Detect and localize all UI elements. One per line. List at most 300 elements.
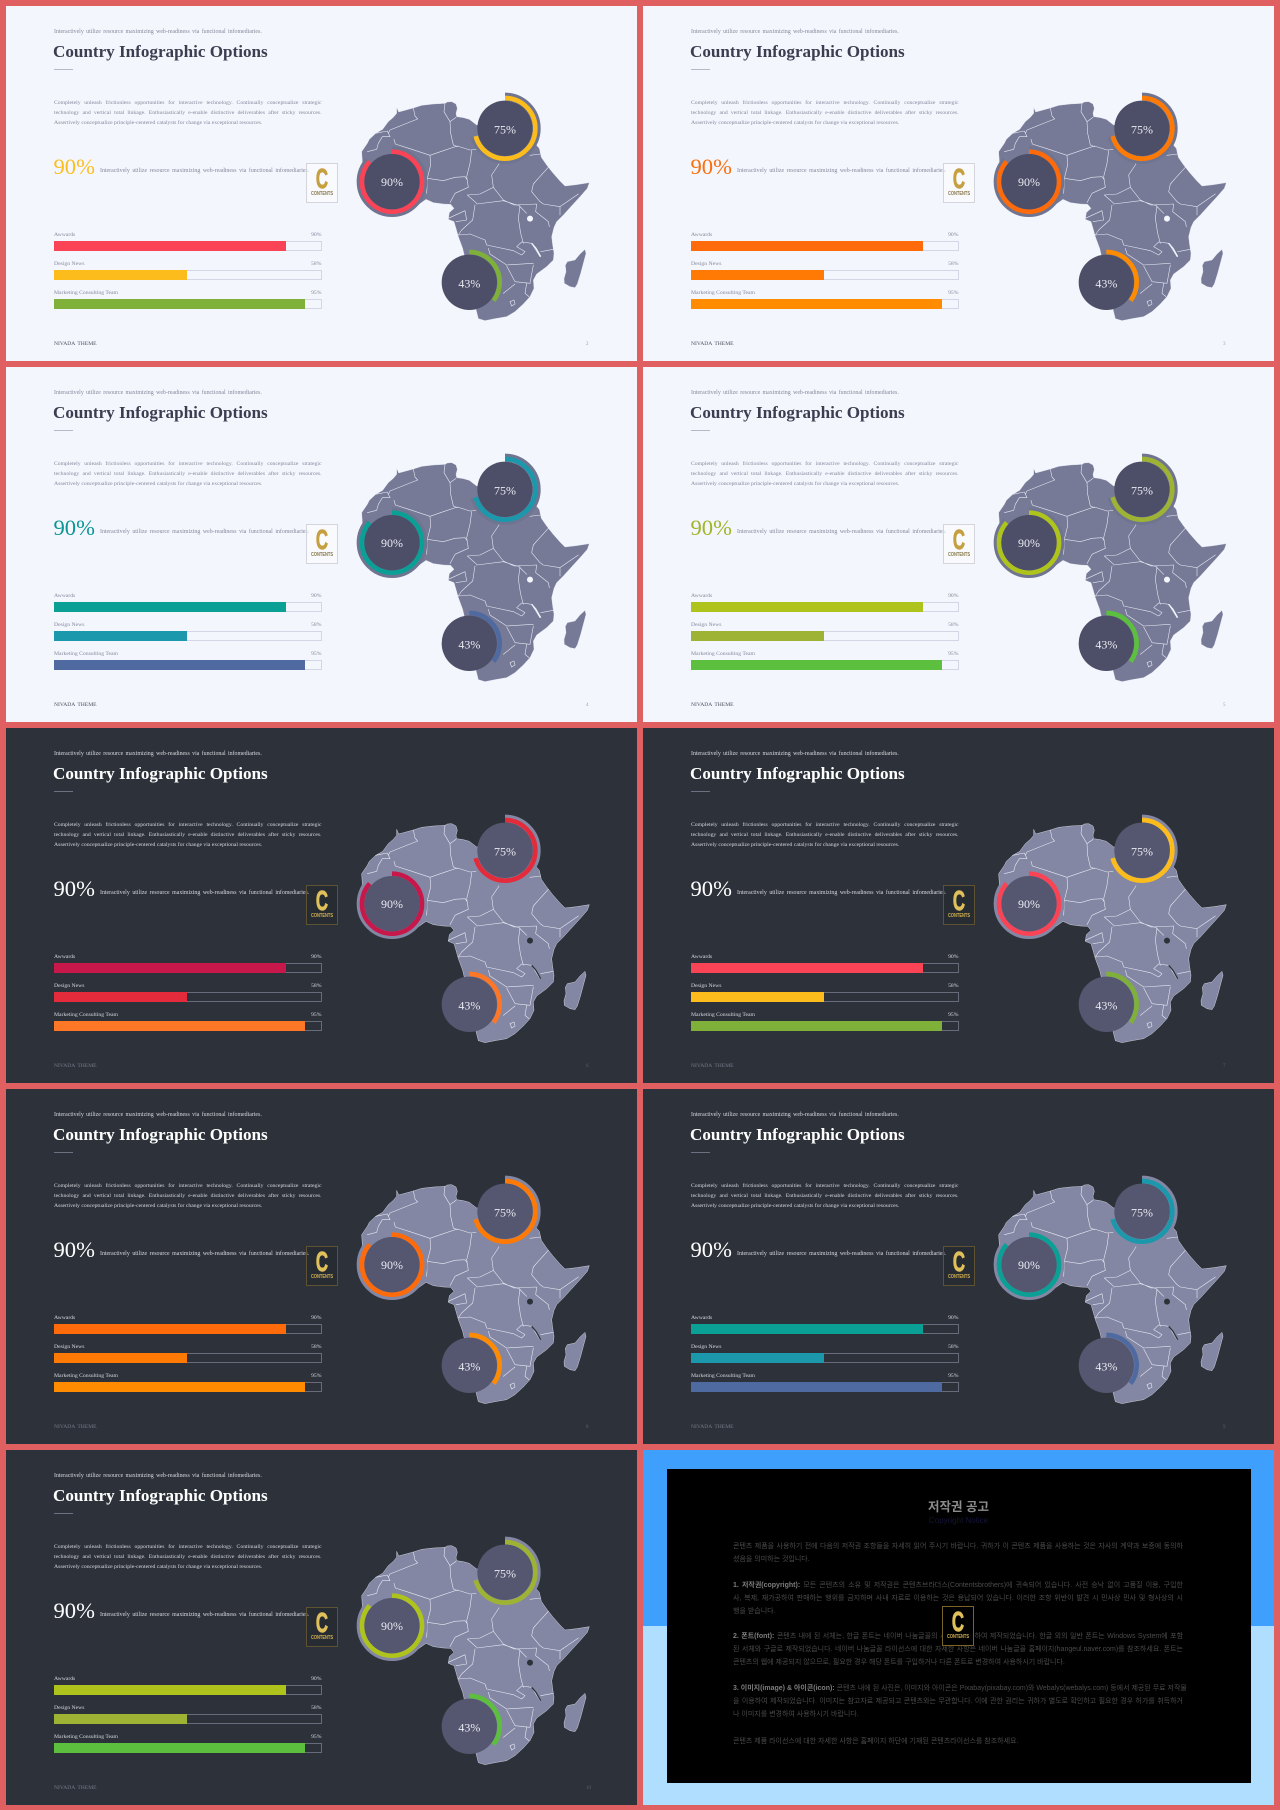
logo badge: C [953,524,965,555]
logo badge: CONTENTS [948,191,970,197]
bar: Design News [691,992,959,1002]
heading: Country Infographic Options [690,764,905,783]
logo badge: CONTENTS [948,1274,970,1280]
bar label: Design News: 58% [948,983,958,989]
body text: Assertively conceptualize principle-centered catalysts for change via exceptional resources. [691,1203,899,1209]
ring: 90% [998,1233,1060,1296]
ring: 90% [998,511,1060,574]
logo badge [306,885,338,925]
stat description: Interactively utilize resource maximizing web-readiness via functional infomediaries. [100,890,309,896]
bar label: Marketing Consulting Team: Marketing Consulting Team [54,1012,118,1018]
body text: technology and vertical total linkage. Enthusiastically e-enable distinctive deliverables after sticky resources. [691,1193,958,1199]
map with progress rings [356,92,590,321]
ring: 90%: 90% [381,1619,403,1633]
bar label: Design News [54,983,322,989]
bar label: Marketing Consulting Team [54,651,322,657]
body text [691,822,958,848]
ring: 43% [1076,613,1137,674]
bar: Design News [691,1353,959,1362]
bar label: Awwards: 90% [948,1315,958,1321]
ring: 90% [998,872,1060,935]
bar: Marketing Consulting Team [54,660,322,670]
ring: 90%: 90% [1018,536,1040,550]
notice item 1: 1. 저작권(copyright): 모든 콘텐츠의 소유 및 저작권은 콘텐츠브라더스(Contentsbrothers)에 귀속되어 있습니다. 사전 승낙 없이 고품질 이용, 구입한 [733,1582,1183,1589]
logo badge: CONTENTS [947,1634,969,1640]
black notice card: 된 서체와 구글로 제작되었습니다. 네이버 나눔글꼴 라이선스에 대한 자세한 사항은 네이버 나눔글꼴 홈페이지(hangeul.naver.com)를 참조하세요. 폰트는 [733,1646,1183,1653]
subtitle: Interactively utilize resource maximizing web-readiness via functional infomediaries. [691,1112,899,1118]
logo badge [306,524,338,564]
body text [54,822,322,848]
ring: 90%: 90% [381,175,403,189]
ring: 75% [1110,1180,1174,1243]
body text: technology and vertical total linkage. Enthusiastically e-enable distinctive deliverables after sticky resources. [691,832,958,838]
bar label: Awwards: Awwards [691,593,712,599]
ring: 43% [439,974,500,1035]
ring: 43% [439,613,500,674]
bar label: Design News: Design News [691,622,722,628]
ring: 43% [439,1335,500,1396]
footer brand: NIVADA THEME [54,341,97,347]
ring: 90% [998,150,1060,213]
ring: 75%: 75% [494,1205,516,1219]
logo badge: CONTENTS [311,1635,333,1641]
logo badge: C [316,885,328,916]
bar: Awwards [54,602,322,612]
bar label: Awwards [691,232,958,238]
subtitle: Interactively utilize resource maximizing web-readiness via functional infomediaries. [691,390,899,396]
heading: Country Infographic Options [53,1125,268,1144]
logo badge: C [316,1246,328,1277]
notice subtitle: Copyright Notice [929,1516,988,1525]
bar label: Marketing Consulting Team: Marketing Consulting Team [691,1012,755,1018]
map with progress rings [356,1176,590,1404]
black notice card: 사, 복제, 재가공하여 판매하는 행위를 금지하며 사내 자료로 이용하는 것은 용납되어 있습니다. 이러한 조항 위반이 발견 시 민사상 민사 및 형사상의 시 [733,1595,1183,1602]
bar label: Design News [54,622,322,628]
bar label: Design News: Design News [691,261,722,267]
bar label: Awwards: Awwards [54,232,75,238]
footer brand: NIVADA THEME [54,1424,97,1430]
bar: Design News [54,1714,322,1724]
ring: 90%: 90% [381,536,403,550]
subtitle: Interactively utilize resource maximizing web-readiness via functional infomediaries. [54,1112,262,1118]
logo badge [943,885,975,925]
bar label: Design News: 58% [948,622,958,628]
logo badge: CONTENTS [948,552,970,558]
bar label: Design News: Design News [54,983,84,989]
ring: 75% [473,458,537,521]
ring: 43%: 43% [458,1720,480,1734]
body text: Assertively conceptualize principle-centered catalysts for change via exceptional resources. [691,120,899,126]
bar label: Marketing Consulting Team: Marketing Consulting Team [691,290,755,296]
bar: Design News [54,631,322,640]
bar label: Awwards: Awwards [691,954,712,960]
panel: light lime [643,367,1274,722]
bar label: Design News [54,1704,322,1712]
panel: dark crimson orange [6,728,637,1083]
body text: Assertively conceptualize principle-centered catalysts for change via exceptional resources. [691,481,899,487]
ring: 43% [439,1696,500,1757]
logo badge [306,1607,338,1647]
bar label: Marketing Consulting Team: Marketing Consulting Team [54,651,118,657]
body text: Assertively conceptualize principle-centered catalysts for change via exceptional resources. [54,120,262,126]
bar: Marketing Consulting Team [691,1021,959,1030]
page number: 2 [586,342,588,347]
bar: Awwards [691,602,959,612]
black notice card: 콘텐츠의 웹에 제공되지 않으므로, 필요한 경우 해당 폰트를 구입하거나 다른 폰트로 변경하여 사용하시기 바랍니다. [733,1659,1065,1666]
page number: 5 [1223,703,1226,708]
body text [54,100,322,126]
notice intro: 콘텐츠 제품을 사용하기 전에 다음의 저작권 조항들을 자세히 읽어 주시기 바랍니다. 귀하가 이 콘텐츠 제품을 사용하는 것은 자사의 계약과 보증에 동의하 [733,1543,1183,1550]
body text: Assertively conceptualize principle-centered catalysts for change via exceptional resources. [54,481,262,487]
ring: 75% [1110,458,1174,521]
black notice card: 나 이미지를 변경하여 사용하시기 바랍니다. [733,1711,859,1718]
bar: Awwards [691,963,959,972]
page number: 7 [1223,1064,1226,1069]
heading: Country Infographic Options [53,403,268,422]
bar: Design News [691,631,959,640]
body text: technology and vertical total linkage. Enthusiastically e-enable distinctive deliverables after sticky resources. [691,110,958,116]
bar label: Awwards: Awwards [54,593,75,599]
panel: dark lime [6,1450,637,1805]
ring: 75% [1110,97,1174,160]
body text: technology and vertical total linkage. Enthusiastically e-enable distinctive deliverables after sticky resources. [54,110,322,116]
bar label: Design News [54,261,322,267]
body text: Completely unleash frictionless opportunities for interactive technology. Continually conceptualize strategic [54,100,322,106]
body text: Assertively conceptualize principle-centered catalysts for change via exceptional resources. [691,842,899,848]
ring: 43%: 43% [1095,1359,1117,1373]
body text: Assertively conceptualize principle-centered catalysts for change via exceptional resources. [54,842,262,848]
stat description: Interactively utilize resource maximizing web-readiness via functional infomediaries. [737,890,946,896]
bar label: Marketing Consulting Team: 95% [948,1373,958,1379]
bar: Design News [691,270,959,280]
bar label: Design News: 58% [311,1705,322,1711]
body text: Completely unleash frictionless opportunities for interactive technology. Continually conceptualize strategic [54,461,322,467]
logo badge [306,1246,338,1286]
bar label: Marketing Consulting Team: Marketing Consulting Team [54,1734,118,1740]
ring: 75% [473,819,537,882]
bar: Awwards [54,963,322,972]
bar label: Design News [691,622,958,628]
bar label: Marketing Consulting Team: 95% [311,1734,322,1740]
bar label: Awwards: 90% [948,954,958,960]
bar label: Design News: Design News [54,1344,84,1350]
map with progress rings [994,454,1226,682]
heading: Country Infographic Options [690,403,905,422]
body text [54,461,322,487]
map with progress rings [994,92,1226,321]
stat: 90%: 90% [690,515,732,540]
body text: Completely unleash frictionless opportunities for interactive technology. Continually conceptualize strategic [54,1183,322,1189]
footer brand: NIVADA THEME [54,702,97,708]
ring: 43% [1076,252,1137,313]
footer brand: NIVADA THEME [54,1063,97,1069]
black notice card: 셨음을 의미하는 것입니다. [733,1556,810,1562]
page number: 3 [1223,342,1226,347]
bar: Awwards [691,1324,959,1334]
logo badge: C [316,1607,328,1638]
bar label: Marketing Consulting Team [691,1012,958,1018]
ring: 90% [361,1594,423,1657]
logo badge: C [316,163,328,194]
bar label: Design News: Design News [691,1344,722,1350]
page number: 6 [586,1064,588,1069]
logo badge [942,1606,974,1646]
footer brand: NIVADA THEME [691,1063,734,1069]
panel: light teal [6,367,637,722]
ring: 43%: 43% [1095,637,1117,651]
ring: 43%: 43% [458,1359,480,1373]
footer brand: NIVADA THEME [691,702,734,708]
bar: Awwards [54,1685,322,1694]
bar label: Design News: 58% [948,261,958,267]
body text: Completely unleash frictionless opportunities for interactive technology. Continually conceptualize strategic [54,1544,322,1550]
stat description: Interactively utilize resource maximizing web-readiness via functional infomediaries. [100,168,309,174]
logo badge: CONTENTS [311,913,333,919]
body text: Completely unleash frictionless opportunities for interactive technology. Continually conceptualize strategic [691,100,958,106]
heading: Country Infographic Options [53,764,268,783]
bar label: Awwards: Awwards [54,1676,75,1682]
logo badge: CONTENTS [311,1274,333,1280]
ring: 90%: 90% [1018,175,1040,189]
bar label: Marketing Consulting Team [54,1012,322,1018]
bar label: Awwards: 90% [311,1676,322,1682]
ring: 75% [473,1541,537,1604]
stat description: Interactively utilize resource maximizing web-readiness via functional infomediaries. [100,1612,309,1618]
ring: 90%: 90% [1018,1258,1040,1272]
panel: dark teal [643,1089,1274,1444]
stat: 90%: 90% [54,154,95,179]
ring: 43%: 43% [1095,998,1117,1012]
panel: dark red yellow green [643,728,1274,1083]
ring: 43%: 43% [458,276,480,290]
logo badge: C [953,1246,965,1277]
stat: 90%: 90% [690,1237,732,1262]
black notice card: 행을 받습니다. [733,1608,776,1615]
bar: Awwards [54,241,322,250]
ring: 90%: 90% [381,897,403,911]
bar label: Marketing Consulting Team [54,1373,322,1379]
body text: Completely unleash frictionless opportunities for interactive technology. Continually conceptualize strategic [691,461,958,467]
stat description: Interactively utilize resource maximizing web-readiness via functional infomediaries. [737,529,946,535]
map with progress rings [330,1524,620,1804]
bar label: Awwards [54,1315,322,1321]
logo badge: CONTENTS [948,913,970,919]
bar label: Design News: Design News [54,261,84,267]
bar: Marketing Consulting Team [54,1021,322,1030]
ring: 75% [473,97,537,160]
bar label: Marketing Consulting Team: 95% [948,651,958,657]
notice title: 저작권 공고 [928,1500,989,1514]
bar label: Marketing Consulting Team: Marketing Consulting Team [54,290,118,296]
stat: 90%: 90% [54,876,95,901]
bar label: Marketing Consulting Team [691,290,958,296]
body text [691,100,958,126]
bar label: Awwards: 90% [948,593,958,599]
body text [54,1542,322,1572]
ring: 43%: 43% [458,998,480,1012]
page number: 9 [1223,1425,1226,1430]
ring: 75% [473,1180,537,1243]
notice closing: 콘텐츠 제품 라이선스에 대한 자세한 사항은 홈페이지 하단에 기재된 콘텐츠라이선스를 참조하세요. [733,1738,1018,1745]
bar label: Awwards: Awwards [54,1315,75,1321]
ring: 75%: 75% [494,122,516,136]
black notice card [666,1469,1250,1783]
bar: Awwards [54,1324,322,1334]
ring: 75%: 75% [1131,844,1153,858]
black notice card: 을 이용하여 제작되었습니다. 이미지는 참고자료 제공되고 콘텐츠와는 무관합니다. 이에 관한 권리는 귀하가 별도로 확인하고 필요한 경우 허가를 취득하거 [733,1698,1183,1705]
map with progress rings [994,1176,1227,1404]
bar label: Awwards [54,232,322,238]
bar label: Awwards: Awwards [54,954,75,960]
panel: light red yellow green [6,6,637,361]
body text: technology and vertical total linkage. Enthusiastically e-enable distinctive deliverables after sticky resources. [54,1193,322,1199]
heading: Country Infographic Options [53,42,268,61]
map with progress rings [356,454,590,682]
logo badge [943,524,975,564]
subtitle: Interactively utilize resource maximizing web-readiness via functional infomediaries. [691,28,899,34]
ring: 90% [361,150,423,213]
bar label: Marketing Consulting Team: Marketing Consulting Team [691,651,755,657]
bar label: Design News: 58% [311,622,322,628]
ring: 43%: 43% [1095,276,1117,290]
bar label: Marketing Consulting Team: Marketing Consulting Team [691,1373,755,1379]
map with progress rings [356,814,590,1043]
bar: Marketing Consulting Team [54,299,322,308]
bar label: Awwards: 90% [311,593,322,599]
ring: 75%: 75% [1131,122,1153,136]
stat: 90%: 90% [690,876,732,901]
bar label: Marketing Consulting Team: 95% [311,1373,322,1379]
bar label: Marketing Consulting Team [691,1373,958,1379]
bar label: Design News: 58% [311,261,322,267]
stat description: Interactively utilize resource maximizing web-readiness via functional infomediaries. [100,529,309,535]
logo badge [943,163,975,203]
bar label: Design News [691,1344,958,1350]
bar label: Awwards [691,593,958,599]
bar label: Awwards [54,593,322,599]
bar label: Marketing Consulting Team [54,290,322,296]
bar label: Design News: 58% [948,1344,958,1350]
bar label: Marketing Consulting Team: 95% [311,290,322,296]
ring: 43% [1076,1335,1137,1396]
logo badge: CONTENTS [311,552,333,558]
bar label: Marketing Consulting Team: 95% [311,1012,322,1018]
page number: 4 [586,703,588,708]
bar label: Awwards [691,954,958,960]
logo badge: C [953,163,965,194]
bar label: Marketing Consulting Team: 95% [948,1012,958,1018]
bar label: Design News: Design News [54,622,84,628]
ring: 90%: 90% [381,1258,403,1272]
body text [691,461,958,487]
logo badge: C [952,1606,964,1637]
bar: Design News [54,1353,322,1362]
bar label: Awwards: 90% [311,954,322,960]
bar label: Awwards: 90% [948,232,958,238]
heading: Country Infographic Options [690,42,905,61]
bar label: Awwards: 90% [311,232,322,238]
bar label: Awwards [54,1675,322,1683]
heading: Country Infographic Options [690,1125,905,1144]
bar: Design News [54,992,322,1002]
page number: 8 [586,1425,588,1430]
subtitle: Interactively utilize resource maximizing web-readiness via functional infomediaries. [54,28,262,34]
logo badge [943,1246,975,1286]
stat: 90%: 90% [54,515,95,540]
bar label: Awwards: Awwards [691,232,712,238]
bar label: Marketing Consulting Team [691,651,958,657]
bar: Awwards [691,241,959,250]
panel: copyright notice [643,1450,1274,1805]
ring: 90% [361,1233,423,1296]
bar: Marketing Consulting Team [54,1743,322,1752]
ring: 90% [361,872,423,935]
body text: Assertively conceptualize principle-centered catalysts for change via exceptional resources. [54,1564,262,1570]
stat description: Interactively utilize resource maximizing web-readiness via functional infomediaries. [737,168,946,174]
subtitle: Interactively utilize resource maximizing web-readiness via functional infomediaries. [54,750,262,756]
bar label: Awwards: Awwards [691,1315,712,1321]
panel: dark orange [6,1089,637,1444]
ring: 75%: 75% [1131,483,1153,497]
bar label: Design News: 58% [311,1344,322,1350]
map with progress rings [994,814,1227,1043]
bar: Marketing Consulting Team [691,1382,959,1392]
bar label: Awwards [691,1315,958,1321]
ring: 43% [1076,974,1137,1035]
bar label: Design News: Design News [54,1705,84,1711]
logo badge [306,163,338,203]
body text: Completely unleash frictionless opportunities for interactive technology. Continually conceptualize strategic [691,1183,958,1189]
logo badge: C [953,885,965,916]
footer brand: NIVADA THEME [54,1785,97,1791]
stat: 90%: 90% [690,154,732,179]
footer brand: NIVADA THEME [691,341,734,347]
bar label: Design News [54,1344,322,1350]
body text: technology and vertical total linkage. Enthusiastically e-enable distinctive deliverables after sticky resources. [691,471,958,477]
bar label: Awwards: 90% [311,1315,322,1321]
footer brand: NIVADA THEME [691,1424,734,1430]
subtitle: Interactively utilize resource maximizing web-readiness via functional infomediaries. [54,1472,262,1478]
stat: 90%: 90% [54,1598,95,1623]
subtitle: Interactively utilize resource maximizing web-readiness via functional infomediaries. [691,750,899,756]
ring: 75%: 75% [494,1566,516,1580]
heading: Country Infographic Options [53,1486,268,1505]
bar label: Design News [691,261,958,267]
ring: 43%: 43% [458,637,480,651]
bar: Design News [54,270,322,280]
body text: Completely unleash frictionless opportunities for interactive technology. Continually conceptualize strategic [54,822,322,828]
body text: technology and vertical total linkage. Enthusiastically e-enable distinctive deliverables after sticky resources. [54,471,322,477]
body text [54,1183,322,1209]
bar label: Design News: Design News [691,983,722,989]
bar label: Marketing Consulting Team: Marketing Consulting Team [54,1373,118,1379]
stat: 90%: 90% [54,1237,95,1262]
stat description: Interactively utilize resource maximizing web-readiness via functional infomediaries. [100,1251,309,1257]
ring: 90% [361,511,423,574]
stat description: Interactively utilize resource maximizing web-readiness via functional infomediaries. [737,1251,946,1257]
panel: light orange [643,6,1274,361]
bar: Marketing Consulting Team [691,660,959,670]
logo badge: C [316,524,328,555]
bar: Marketing Consulting Team [54,1382,322,1392]
ring: 43% [439,252,500,313]
ring: 75% [1110,819,1174,882]
subtitle: Interactively utilize resource maximizing web-readiness via functional infomediaries. [54,390,262,396]
page number: 10 [586,1786,591,1791]
logo badge: CONTENTS [311,191,333,197]
bar: Marketing Consulting Team [691,299,959,308]
ring: 75%: 75% [494,483,516,497]
